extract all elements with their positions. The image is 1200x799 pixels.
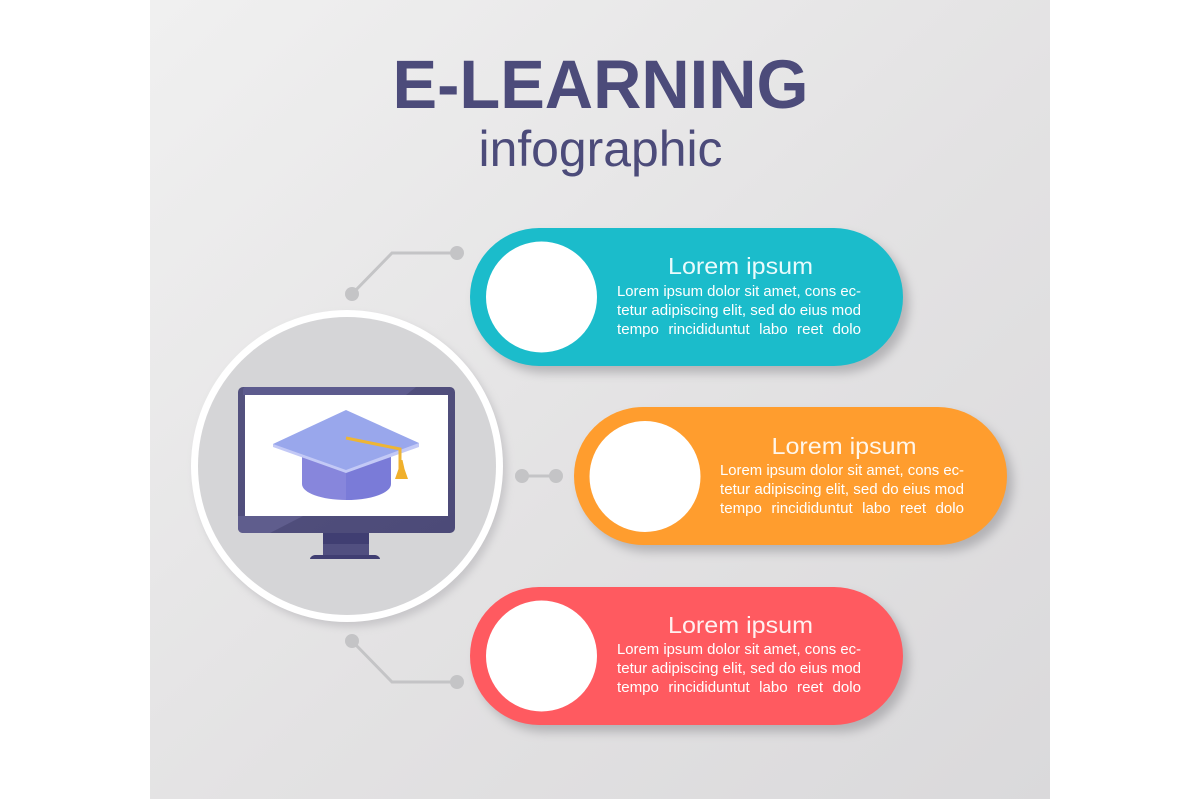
body text: red: tempo rincididuntut labo reet dolo: [617, 680, 861, 696]
panel: teal: [470, 228, 909, 373]
icon placeholder: teal: [486, 242, 597, 352]
body text: red: [617, 642, 861, 696]
heading: orange: Lorem ipsum: [772, 433, 916, 459]
body text: orange: tempo rincididuntut labo reet dolo: [720, 501, 964, 517]
connector: top: [345, 246, 464, 301]
subtitle: infographic: [478, 121, 722, 177]
body text: teal: Lorem ipsum dolor sit amet, cons ec-: [617, 284, 861, 300]
connector: bottom: [345, 634, 464, 689]
heading: teal: Lorem ipsum: [668, 253, 813, 279]
body text: teal: tempo rincididuntut labo reet dolo: [617, 322, 861, 338]
body text: orange: [720, 463, 964, 517]
background panel: [150, 0, 1050, 799]
title: E-LEARNING: [392, 46, 808, 123]
icon placeholder: red: [486, 600, 597, 712]
icon: monitor: [238, 387, 455, 559]
icon placeholder: orange: [590, 421, 700, 532]
body text: orange: tetur adipiscing elit, sed do eius mod: [720, 482, 964, 498]
body text: teal: tetur adipiscing elit, sed do eius mod: [617, 303, 861, 319]
panel: orange: [574, 407, 1013, 552]
panel: red: [470, 587, 909, 732]
body text: teal: [617, 284, 861, 338]
central monitor badge: [191, 310, 507, 627]
heading: red: Lorem ipsum: [668, 612, 813, 638]
icon: graduation cap: [273, 410, 419, 500]
body text: red: Lorem ipsum dolor sit amet, cons ec-: [617, 642, 861, 658]
body text: red: tetur adipiscing elit, sed do eius mod: [617, 661, 861, 677]
body text: orange: Lorem ipsum dolor sit amet, cons ec-: [720, 463, 964, 479]
connector: middle: [515, 469, 563, 483]
